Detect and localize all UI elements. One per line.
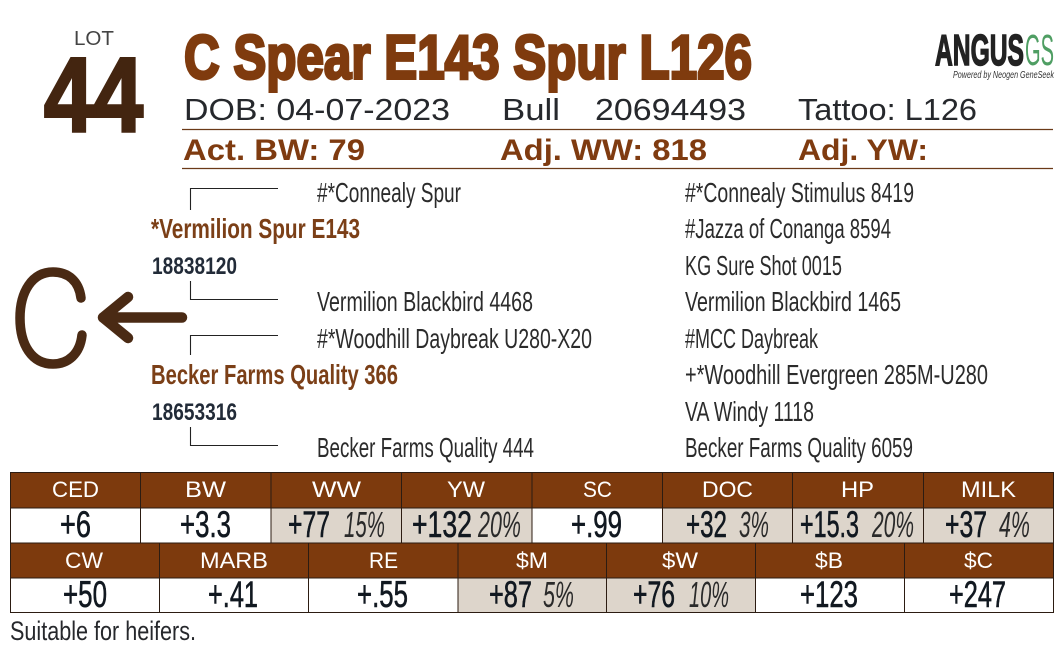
row 1 values: +132 [412,504,472,545]
row 1 headers: WW [312,477,361,502]
row 1 headers: SC [583,477,612,502]
birth info row: DOB: 04-07-2023 [184,92,450,127]
row 1 headers [52,477,1016,502]
pedigree: sires and dams: 18653316 [152,399,237,426]
lot number: LOT [74,28,114,50]
arrow [103,297,182,338]
row 2 headers: $W [662,548,698,573]
weights row: Adj. WW: 818 [500,134,707,167]
EPD table [10,472,1054,615]
row 1 values: +6 [60,504,91,545]
row 1 values: 15% [344,504,385,545]
row 2 values: +247 [949,574,1006,615]
weights row: Adj. YW: [798,134,928,167]
weights row: Act. BW: 79 [183,134,365,167]
pedigree: great-grandparents: #Jazza of Conanga 8594 [685,213,891,244]
row 1 headers: MILK [961,477,1016,502]
row 2 headers: RE [369,548,398,573]
pedigree: great-grandparents [685,177,988,463]
row 1 values: +77 [288,504,330,545]
row 1 values: 20% [477,504,521,545]
row 2 headers: CW [65,548,103,573]
row 1 values: +.99 [571,504,622,545]
row 2 values: +87 [489,574,532,615]
pedigree: grandparents [317,177,592,463]
row 1 values [60,504,1030,545]
row 1 values: +37 [945,504,987,545]
birth info row: 20694493 [595,92,746,127]
pedigree: grandparents: #*Woodhill Daybreak U280-X20 [317,323,592,354]
pedigree: sires and dams: *Vermilion Spur E143 [151,213,360,244]
row 2 headers: $M [516,548,548,573]
pedigree: great-grandparents: KG Sure Shot 0015 [685,250,842,281]
row 2 values: +.41 [208,574,258,615]
row 1 values: +3.3 [180,504,231,545]
pedigree brackets [190,188,278,446]
pedigree: great-grandparents: Becker Farms Quality 6059 [685,432,913,463]
row 1 headers: DOC [702,477,753,502]
pedigree: great-grandparents: Vermilion Blackbird 1465 [685,286,901,317]
row 2 headers [65,548,993,573]
pedigree: sires and dams: 18838120 [152,253,237,280]
icon: horned status C [20,272,82,364]
row 1 headers: BW [185,477,226,502]
row 1 headers: YW [447,477,485,502]
row 2 values: +76 [633,574,675,615]
row 1 values: 4% [999,504,1030,545]
row 2 values: 10% [689,574,729,615]
birth info row: Tattoo: L126 [798,92,977,127]
row 2 values: +123 [800,574,858,615]
row 2 headers: MARB [200,548,268,573]
row 1 headers: CED [52,477,99,502]
pedigree: great-grandparents: #*Connealy Stimulus 8419 [685,177,914,208]
pedigree: grandparents: #*Connealy Spur [317,177,461,208]
pedigree: grandparents: Becker Farms Quality 444 [317,432,534,463]
row 2 headers: $C [964,548,993,573]
pedigree: sires and dams: Becker Farms Quality 366 [151,359,398,390]
row 1 values: 20% [871,504,914,545]
title: C Spear E143 Spur L126 [184,24,752,92]
footnote: Suitable for heifers. [10,616,196,646]
row 2 headers: $B [815,548,843,573]
lot number: 44 [44,36,143,154]
row 2 values [63,574,1006,615]
row 2 values: 5% [543,574,574,615]
row 2 values: +50 [63,574,107,615]
table backgrounds [10,472,1054,613]
row 1 values: 3% [739,504,769,545]
row 1 headers: HP [841,477,874,502]
pedigree: great-grandparents: VA Windy 1118 [685,396,814,427]
row 2 values: +.55 [357,574,408,615]
weights row [183,134,928,167]
row 1 values: +32 [686,504,727,545]
pedigree: sires and dams [151,213,398,426]
pedigree: grandparents: Vermilion Blackbird 4468 [317,286,533,317]
birth info row: Bull [502,92,560,127]
birth info row [184,92,977,127]
pedigree: great-grandparents: #MCC Daybreak [685,323,819,354]
row 1 values: +15.3 [800,504,859,545]
